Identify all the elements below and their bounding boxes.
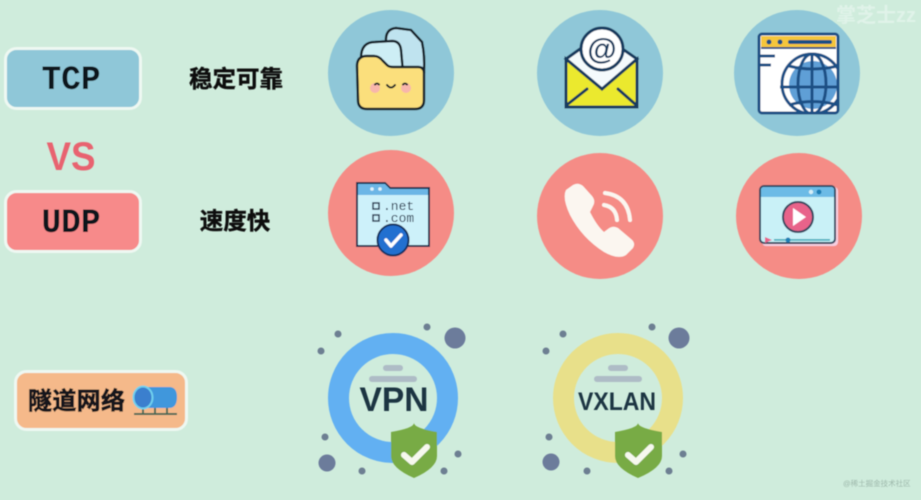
icon: domain window on red circle [328, 150, 454, 276]
TCP label box [6, 48, 140, 108]
watermark: bottom right: @稀土掘金技术社区 [843, 478, 911, 488]
UDP label box [6, 192, 140, 252]
VPN badge [318, 324, 466, 478]
VS label: VS [46, 135, 96, 179]
VXLAN badge [542, 324, 690, 478]
watermark: top right: 掌芝士zz [836, 4, 916, 27]
tunnel network label box [16, 372, 186, 430]
UDP feature text: 速度快 [200, 208, 271, 234]
icon: video player on red circle [736, 153, 862, 279]
icon: tunnel pipe [134, 386, 177, 414]
icon: domain window on red circle: .com [383, 211, 414, 226]
VPN badge: VPN [360, 381, 428, 419]
icon: email on blue circle: @ [587, 33, 617, 66]
TCP label box: TCP [42, 62, 100, 100]
icon: phone on red circle [537, 153, 663, 279]
TCP feature text: 稳定可靠 [189, 66, 283, 92]
VXLAN badge: VXLAN [578, 388, 656, 416]
icon: folder on blue circle [328, 10, 454, 136]
tunnel network label box: 隧道网络 [28, 387, 125, 415]
icon: email on blue circle [537, 10, 663, 136]
icon: domain window on red circle: .net [383, 199, 414, 214]
UDP label box: UDP [42, 205, 100, 243]
icon: browser globe on blue circle [734, 10, 860, 136]
